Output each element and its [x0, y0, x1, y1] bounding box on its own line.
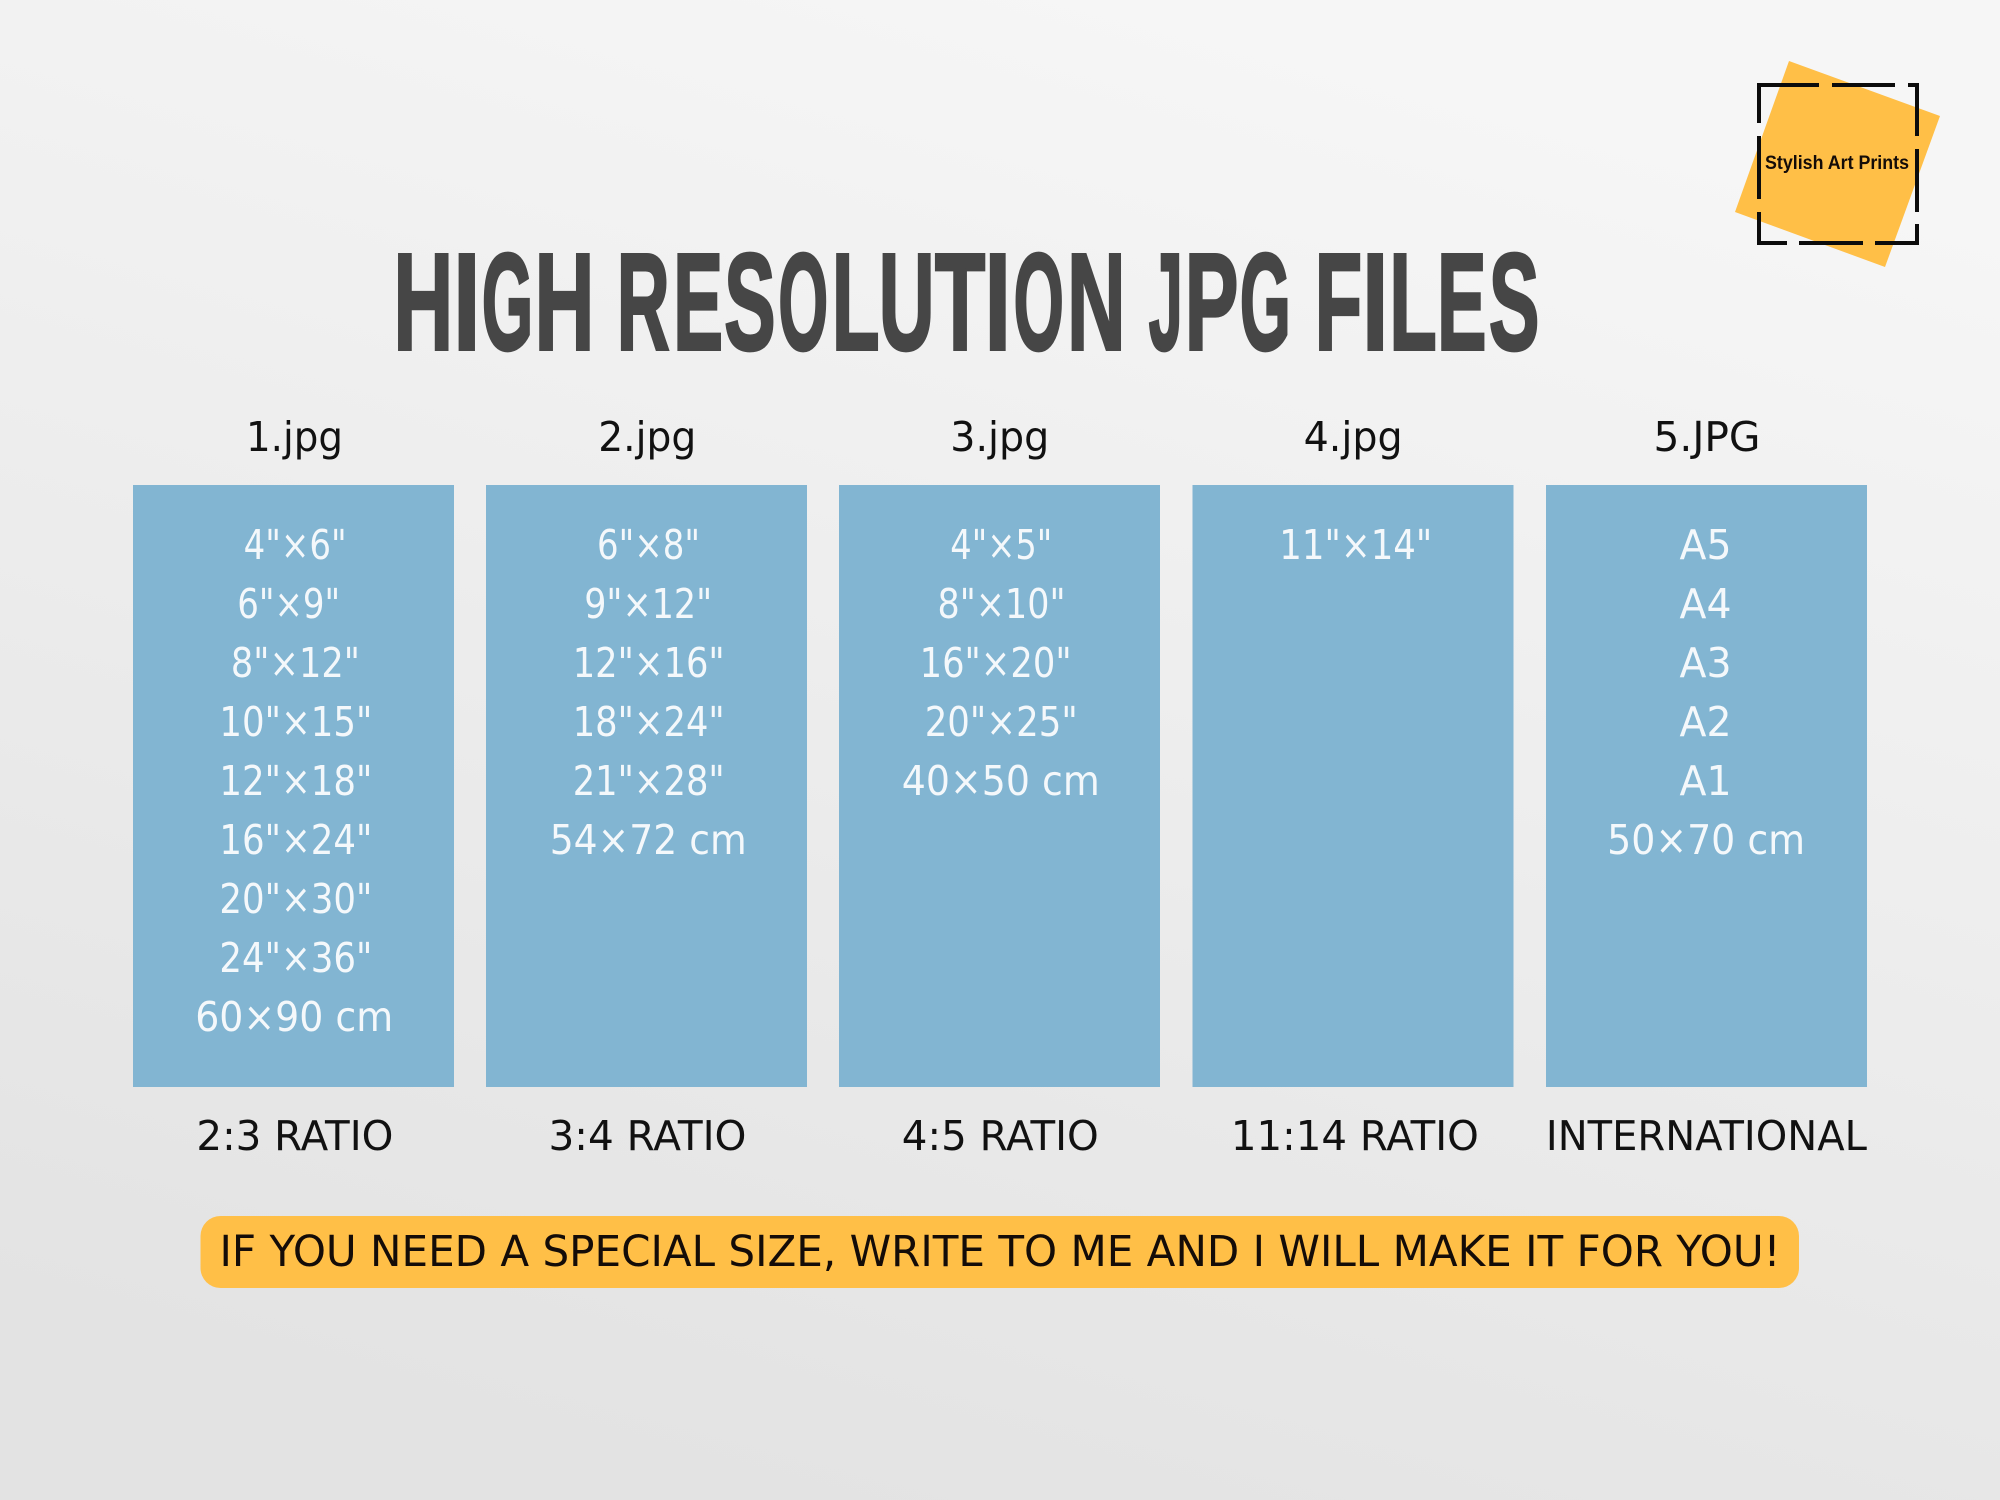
column 4: 11:14 ratio — [1192, 413, 1514, 1160]
sizes list 2: 9"×12" — [584, 580, 712, 628]
logo yellow square — [1735, 61, 1940, 267]
title: F — [1315, 226, 1362, 380]
sizes list 1: 24"×36" — [219, 934, 372, 982]
banner text: IF YOU NEED A SPECIAL SIZE, WRITE TO ME AND I WILL MAKE IT FOR YOU! — [220, 1228, 1780, 1277]
panel 2 — [486, 485, 807, 1087]
title: L — [832, 226, 880, 380]
sizes list 5: A5 — [1680, 521, 1732, 569]
title: I — [453, 226, 480, 380]
sizes list 5: A1 — [1680, 757, 1732, 805]
column 1: 2:3 ratio — [133, 413, 454, 1160]
title: P — [1185, 226, 1238, 380]
title: J — [1149, 226, 1183, 380]
logo dashed frame — [1759, 85, 1917, 243]
sizes list 1: 16"×24" — [219, 816, 372, 864]
sizes list 2: 54×72 cm — [550, 816, 747, 864]
logo text: Stylish Art Prints — [1765, 153, 1909, 174]
sizes list 3: 40×50 cm — [902, 757, 1100, 805]
sizes list 2 — [550, 521, 747, 864]
title: S — [724, 226, 776, 380]
sizes list 1: 60×90 cm — [195, 993, 393, 1041]
file label 2.jpg: 2.jpg — [598, 413, 696, 461]
title: G — [482, 226, 533, 380]
panel 5 — [1546, 485, 1867, 1087]
title: H — [535, 226, 594, 380]
sizes list 5: 50×70 cm — [1607, 816, 1805, 864]
title: L — [1389, 226, 1437, 380]
title: H — [393, 226, 453, 380]
sizes list 2: 12"×16" — [573, 639, 725, 687]
panel 4 — [1192, 485, 1514, 1087]
sizes list 2: 21"×28" — [573, 757, 725, 805]
file label 1.jpg: 1.jpg — [246, 413, 343, 461]
ratio label 3:4: 3:4 RATIO — [548, 1112, 746, 1160]
file label 4.jpg: 4.jpg — [1304, 413, 1403, 461]
column 5: international — [1546, 413, 1867, 1160]
banner background — [200, 1216, 1799, 1288]
title: T — [935, 226, 985, 380]
sizes list 3: 20"×25" — [925, 698, 1078, 746]
column 3: 4:5 ratio — [839, 413, 1160, 1160]
sizes list 1: 4"×6" — [244, 521, 347, 569]
title: G — [1240, 226, 1291, 380]
title: N — [1067, 226, 1126, 380]
file label 5.JPG: 5.JPG — [1654, 413, 1760, 461]
callout banner — [200, 1216, 1799, 1288]
sizes list 1: 12"×18" — [219, 757, 372, 805]
column 2: 3:4 ratio — [486, 413, 807, 1160]
sizes list 1 — [195, 521, 393, 1041]
ratio label international: INTERNATIONAL — [1546, 1112, 1867, 1160]
sizes list 5: A3 — [1680, 639, 1732, 687]
panel 3 — [839, 485, 1160, 1087]
sizes list 3: 16"×20" — [920, 639, 1072, 687]
panel 1 — [133, 485, 454, 1087]
sizes list 3: 4"×5" — [950, 521, 1052, 569]
title: E — [1437, 226, 1486, 380]
sizes list 3: 8"×10" — [938, 580, 1066, 628]
sizes list 1: 6"×9" — [237, 580, 340, 628]
logo: Stylish Art Prints — [1735, 61, 1940, 267]
sizes list 3 — [902, 521, 1100, 805]
sizes list 1: 20"×30" — [219, 875, 372, 923]
sizes list 5: A4 — [1680, 580, 1732, 628]
sizes list 1: 10"×15" — [219, 698, 372, 746]
sizes list 4: 11"×14" — [1279, 521, 1432, 569]
sizes list 1: 8"×12" — [231, 639, 360, 687]
file label 3.jpg: 3.jpg — [950, 413, 1049, 461]
title: S — [1489, 226, 1539, 380]
title: I — [984, 226, 1011, 380]
title: E — [673, 226, 723, 380]
ratio label 2:3: 2:3 RATIO — [196, 1112, 393, 1160]
sizes list 2: 18"×24" — [573, 698, 725, 746]
title: O — [1014, 226, 1064, 380]
title: I — [1362, 226, 1388, 380]
sizes list 5: A2 — [1680, 698, 1732, 746]
sizes list 5 — [1607, 521, 1805, 864]
ratio label 4:5: 4:5 RATIO — [902, 1112, 1099, 1160]
title: U — [879, 226, 934, 380]
title: O — [778, 226, 828, 380]
title: R — [617, 226, 670, 380]
sizes list 2: 6"×8" — [597, 521, 700, 569]
ratio label 11:14: 11:14 RATIO — [1231, 1112, 1479, 1160]
